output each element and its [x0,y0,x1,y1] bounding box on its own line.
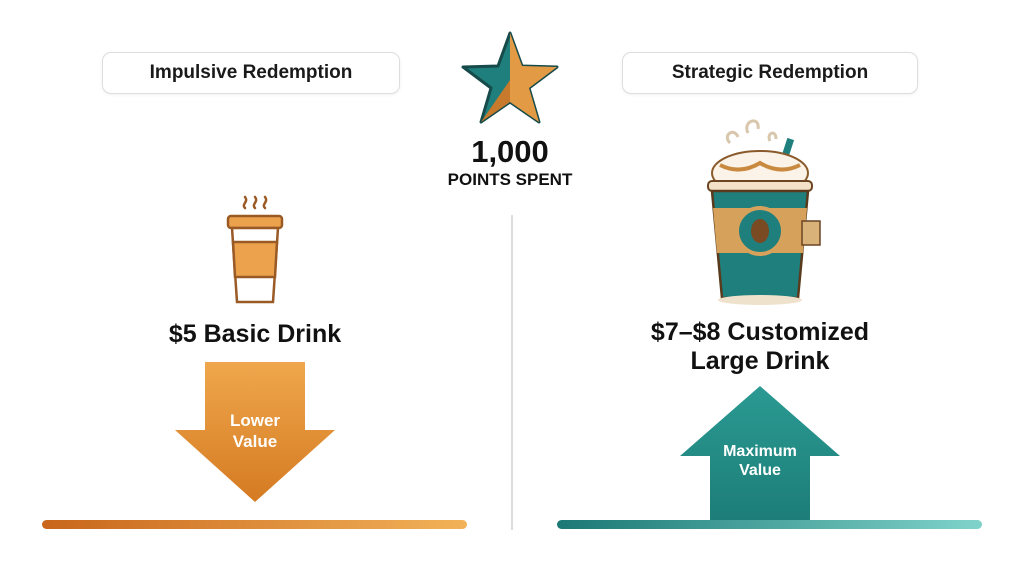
heading: strategic redemption [622,52,918,94]
heading: impulsive redemption [102,52,400,94]
arrow: maximum value: Maximum [723,443,797,460]
text: points spent [448,134,572,189]
divider [511,215,512,530]
arrow: maximum value [680,386,840,520]
text: points spent: 1,000 [471,134,549,169]
icon: customized drink [707,119,821,305]
arrow: lower value [175,362,335,502]
icon: basic cup [226,196,284,304]
bar: left gradient [42,520,467,529]
arrow: maximum value: Value [739,462,781,479]
icon: star [461,32,558,124]
arrow: lower value: Lower [230,411,280,430]
text: points spent: POINTS SPENT [448,170,572,189]
bar: right gradient [557,520,982,529]
text: basic drink label: $5 Basic Drink [169,320,341,348]
heading: strategic redemption: Strategic Redemption [672,62,868,83]
text: customized drink label: Large Drink [691,347,829,375]
text: customized drink label [651,318,869,375]
text: customized drink label: $7–$8 Customized [651,318,869,346]
heading: impulsive redemption: Impulsive Redemption [150,62,352,83]
arrow: lower value: Value [233,432,277,451]
